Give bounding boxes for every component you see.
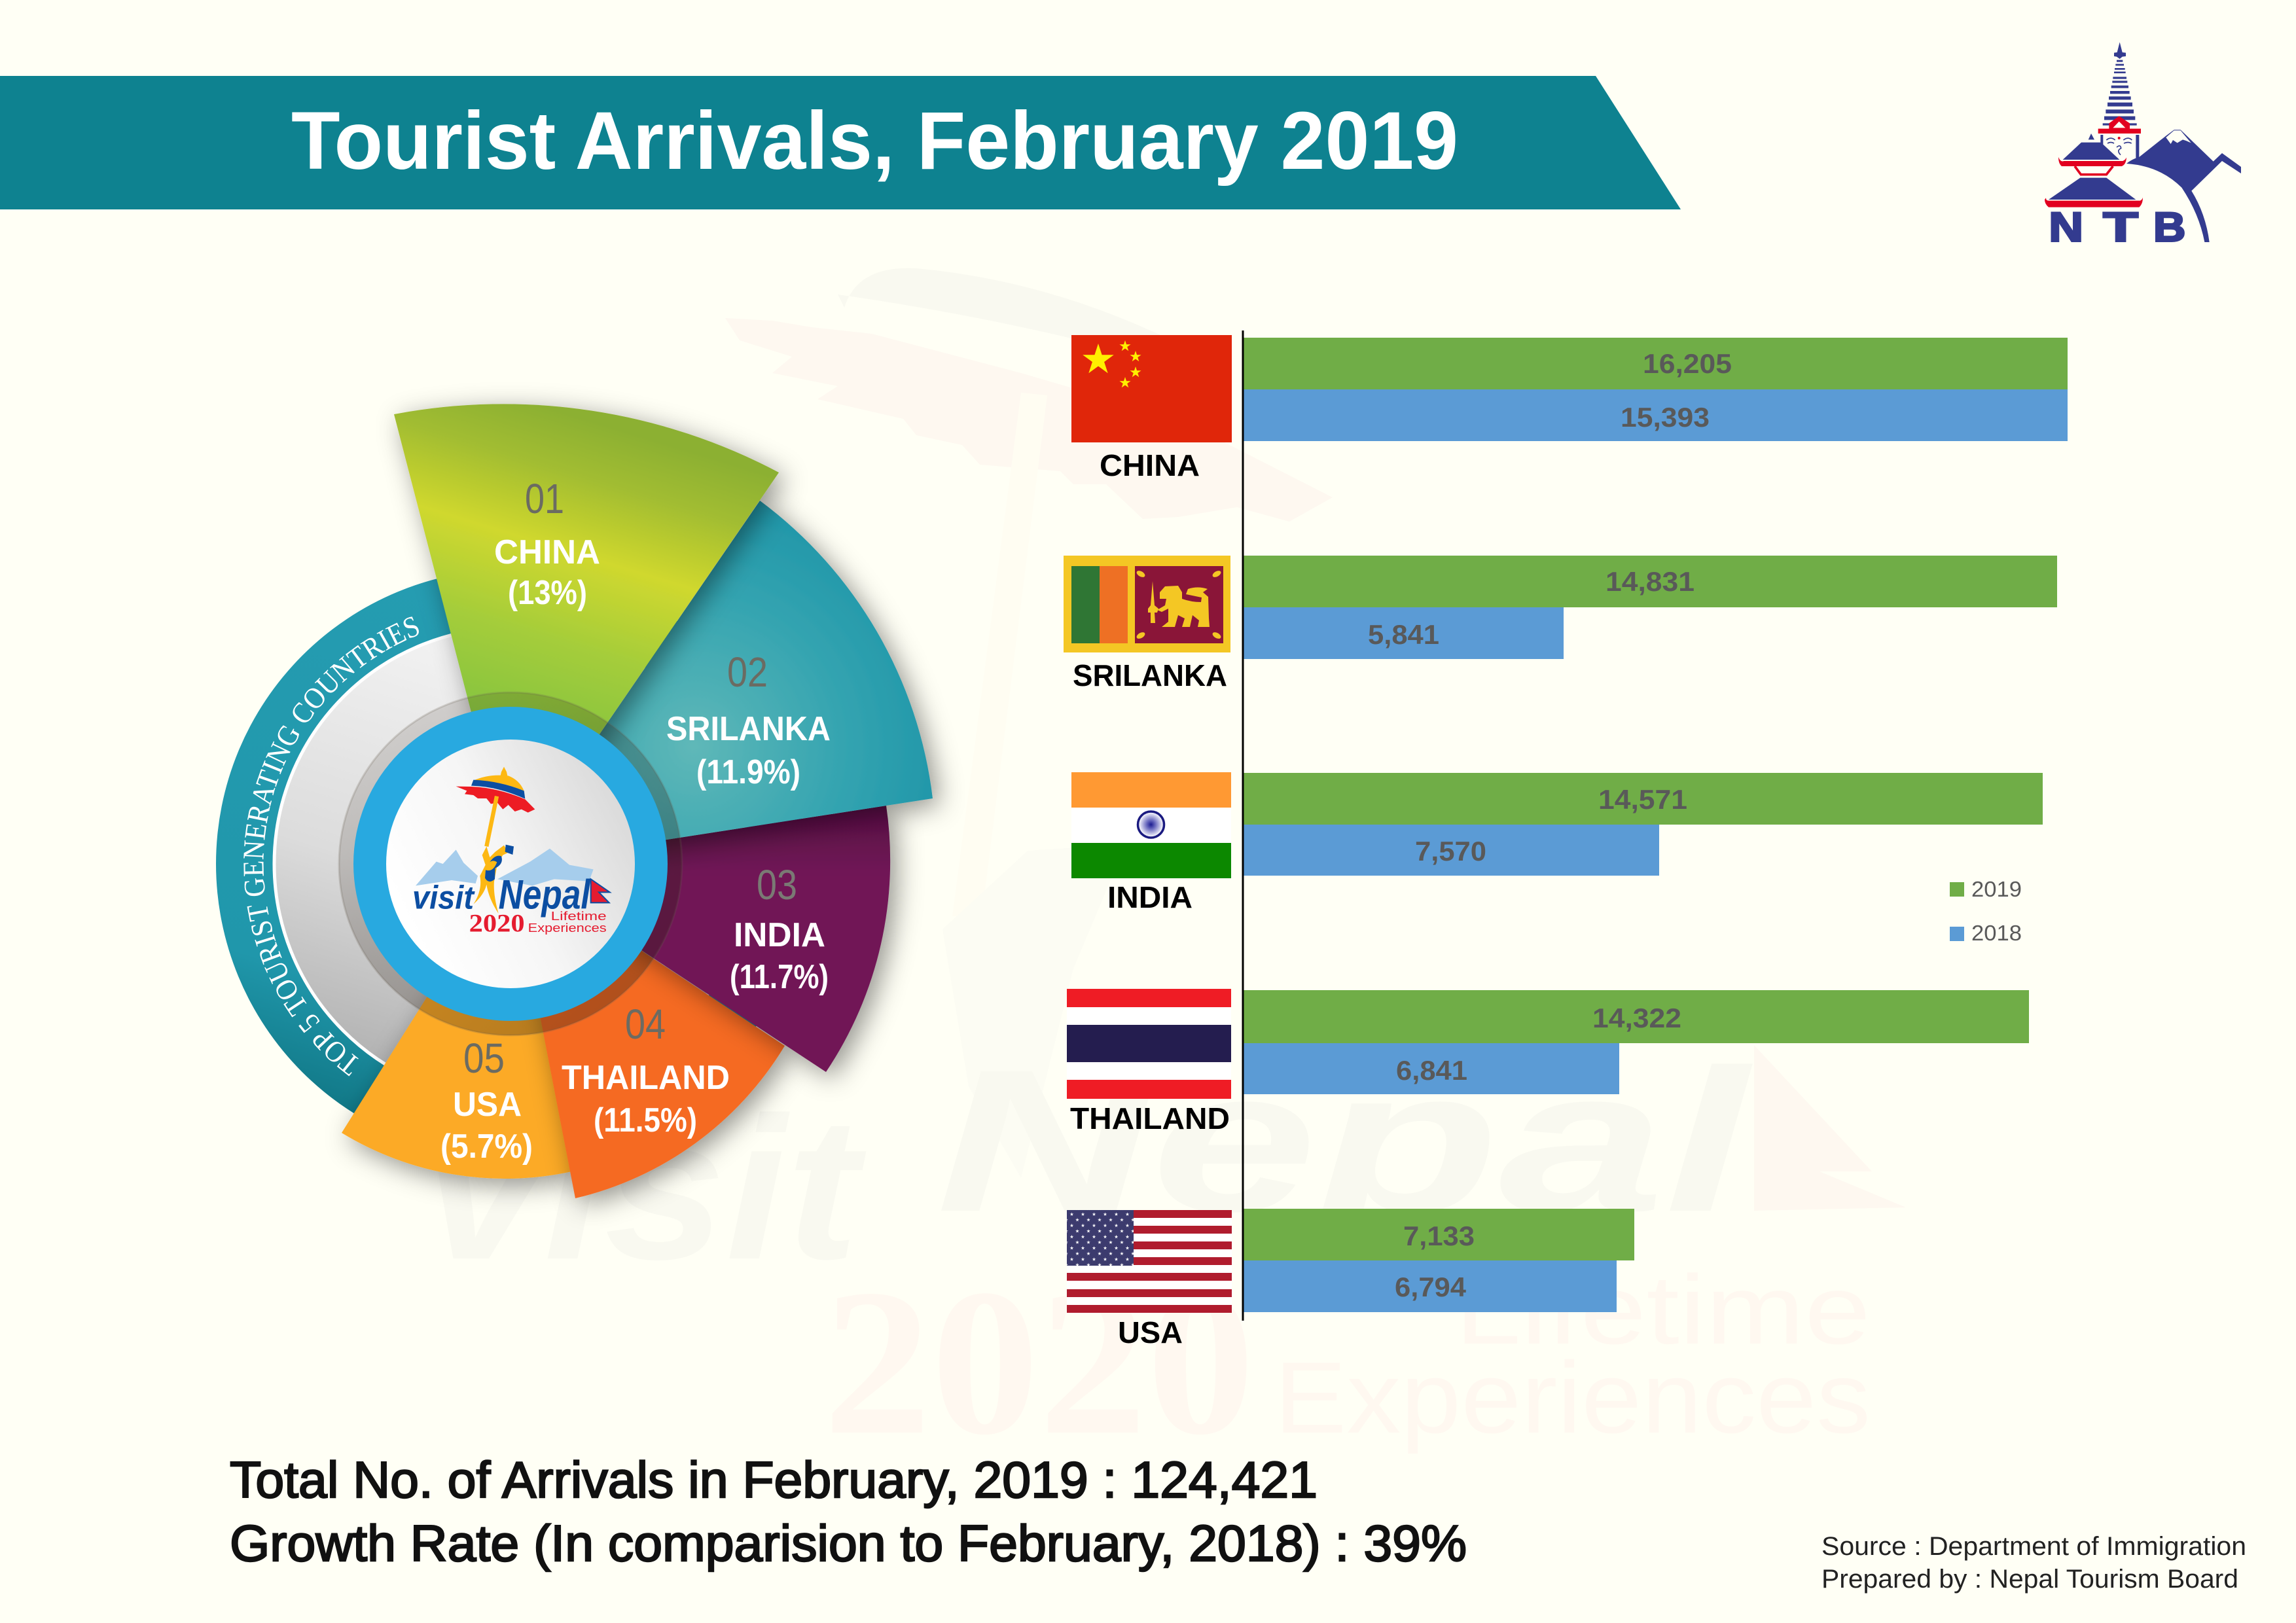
row: China: CHINA xyxy=(1100,448,1200,482)
watermark: visit Nepal 2020 logo: Lifetime xyxy=(1455,1255,1871,1364)
row: Sri Lanka xyxy=(1064,556,2057,692)
label: Sri Lanka: 02 xyxy=(727,649,768,696)
label: Thailand: THAILAND xyxy=(562,1059,730,1097)
wedge: USA xyxy=(342,864,572,1179)
wedge: China xyxy=(394,404,779,864)
NTB logo: B xyxy=(2153,204,2185,250)
watermark: visit Nepal 2020 logo: Experiences xyxy=(1274,1341,1871,1454)
row: India: 14,571 xyxy=(1598,784,1687,815)
visit Nepal 2020 logo: Experiences xyxy=(528,921,607,935)
row: Sri Lanka: 5,841 xyxy=(1368,619,1439,650)
label: Thailand: 04 xyxy=(625,1001,666,1048)
wedge: Thailand xyxy=(511,864,785,1198)
row: China: 16,205 xyxy=(1643,348,1732,379)
row: India: 7,570 xyxy=(1415,836,1486,866)
watermark: visit Nepal 2020 logo: visit xyxy=(423,1075,868,1302)
title: Tourist Arrivals, February 2019 xyxy=(291,96,1458,187)
summary: total arrivals and growth rate: Growth Rate (In comparision to February, 2018) : 39% xyxy=(230,1514,1467,1572)
summary: total arrivals and growth rate: Total No. of Arrivals in February, 2019 : 124,421 xyxy=(230,1451,1318,1508)
row: USA: USA xyxy=(1118,1315,1183,1349)
row: India xyxy=(1071,772,2043,914)
label: China: (13%) xyxy=(508,574,587,612)
wedge: Sri Lanka xyxy=(511,501,933,864)
NTB logo xyxy=(2045,42,2241,251)
visit Nepal 2020 logo: 2020 xyxy=(469,908,525,937)
NTB logo: N xyxy=(2049,204,2083,251)
label: India: (11.7%) xyxy=(730,958,829,996)
watermark: visit Nepal 2020 logo: 2020 xyxy=(823,1247,1255,1478)
row: Sri Lanka: 14,831 xyxy=(1605,566,1695,597)
row: Thailand xyxy=(1067,989,2029,1135)
row: Sri Lanka: SRILANKA xyxy=(1073,658,1227,692)
row: USA: 6,794 xyxy=(1395,1272,1467,1302)
center blue ring xyxy=(353,707,668,1021)
center shadow ring xyxy=(339,692,682,1035)
label: India: INDIA xyxy=(734,916,825,954)
legend: 2019 xyxy=(1971,877,2022,901)
label: China xyxy=(494,475,600,612)
row: Thailand: 6,841 xyxy=(1396,1055,1467,1086)
outer ring with caption: TOP 5 TOURIST GENERATING COUNTRIES xyxy=(243,616,419,1076)
wedge: India xyxy=(511,806,890,1072)
title banner xyxy=(0,76,1681,209)
source note: Prepared by : Nepal Tourism Board xyxy=(1821,1565,2238,1594)
label: Sri Lanka: SRILANKA xyxy=(666,710,831,748)
source note xyxy=(1821,1532,2246,1594)
watermark: visit Nepal 2020 logo xyxy=(423,268,1906,1478)
label: Sri Lanka: (11.9%) xyxy=(696,753,800,791)
label: Thailand xyxy=(562,1001,730,1139)
row: USA xyxy=(1067,1209,1634,1349)
flag: USA xyxy=(1067,1210,1232,1313)
visit Nepal 2020 logo: Nepal xyxy=(499,872,591,918)
row: India: INDIA xyxy=(1107,880,1193,914)
label: Sri Lanka xyxy=(666,649,831,791)
label: Thailand: (11.5%) xyxy=(594,1101,697,1139)
row: China xyxy=(1071,335,2068,482)
row: Thailand: THAILAND xyxy=(1070,1101,1230,1135)
chart axis xyxy=(1242,330,1244,1321)
label: USA: 05 xyxy=(463,1035,505,1082)
label: USA: USA xyxy=(453,1086,522,1124)
outer ring with caption xyxy=(216,579,801,1114)
figure xyxy=(473,845,514,914)
source note: Source : Department of Immigration xyxy=(1821,1532,2246,1561)
visit Nepal 2020 logo xyxy=(412,767,610,937)
flag: India xyxy=(1071,772,1231,878)
donut infographic: top 5 countries xyxy=(216,393,954,1217)
mountains xyxy=(416,849,594,885)
logo text: visit xyxy=(412,879,475,916)
flag: China xyxy=(1071,335,1232,442)
label: India xyxy=(730,861,829,996)
flag: Sri Lanka xyxy=(1064,556,1230,652)
summary: total arrivals and growth rate xyxy=(230,1451,1467,1572)
label: China: 01 xyxy=(525,475,564,522)
center white disc xyxy=(386,740,635,988)
bar chart xyxy=(1064,330,2068,1349)
label: USA xyxy=(440,1035,533,1166)
watermark: visit Nepal 2020 logo: Nepal xyxy=(936,1027,1753,1255)
legend: 2018 xyxy=(1971,921,2022,945)
visit Nepal 2020 logo: Lifetime xyxy=(551,909,607,923)
label: India: 03 xyxy=(757,861,797,908)
label: USA: (5.7%) xyxy=(440,1128,533,1166)
label: China: CHINA xyxy=(494,533,600,571)
row: China: 15,393 xyxy=(1621,402,1710,433)
flag: Thailand xyxy=(1067,989,1231,1099)
Nepal flag xyxy=(591,879,610,902)
umbrella xyxy=(456,767,535,846)
legend xyxy=(1950,877,2022,945)
row: Thailand: 14,322 xyxy=(1592,1003,1681,1033)
row: USA: 7,133 xyxy=(1403,1221,1475,1251)
NTB logo: T xyxy=(2103,204,2138,251)
